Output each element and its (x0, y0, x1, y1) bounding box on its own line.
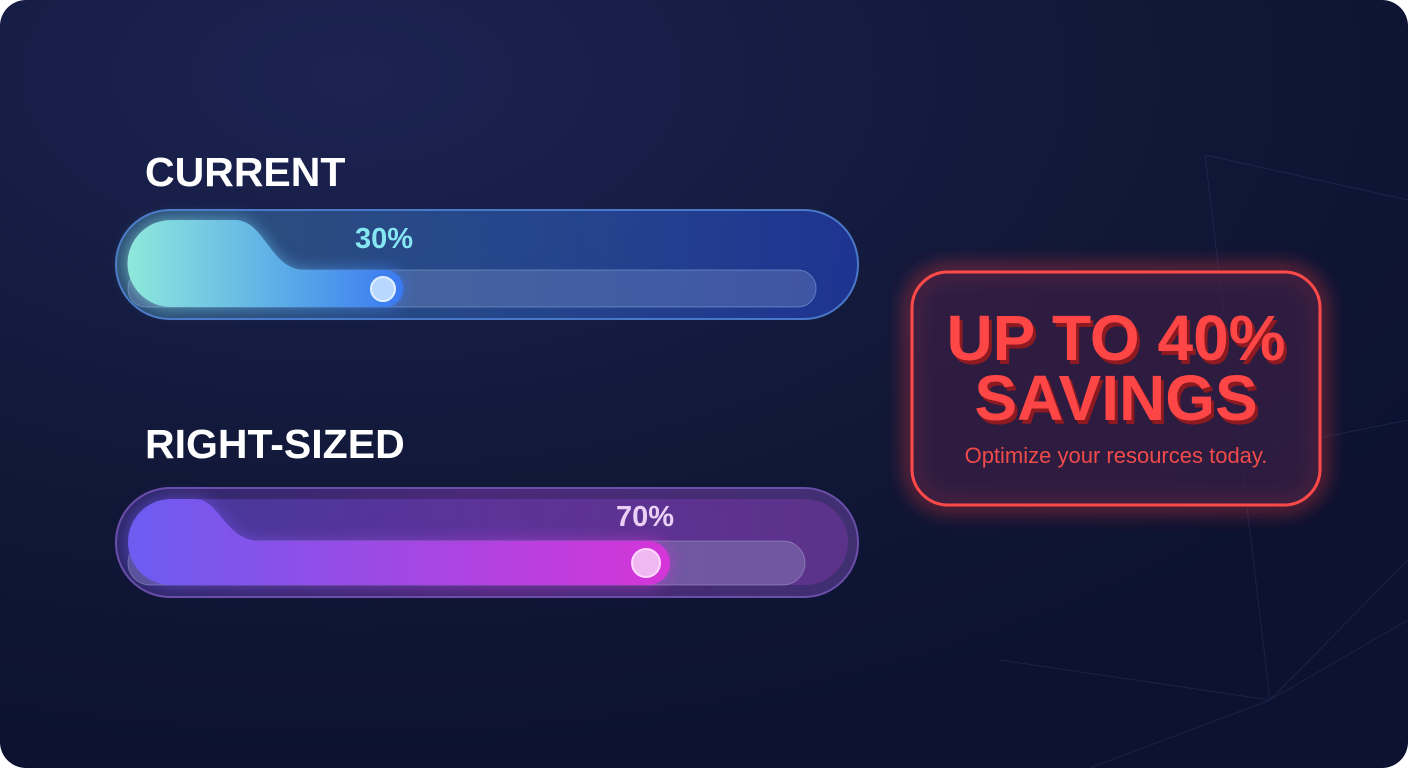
knob (371, 277, 395, 301)
callout: savings (912, 272, 1320, 505)
callout: savings: SAVINGS (974, 362, 1258, 434)
callout: savings: Optimize your resources today. (965, 443, 1267, 468)
bar: current 30% (116, 210, 858, 319)
heading: current: CURRENT (145, 149, 345, 195)
heading: right-sized: RIGHT-SIZED (145, 421, 405, 467)
callout: savings: UP TO 40% (946, 302, 1286, 374)
knob (632, 549, 660, 577)
callout: savings: UP TO 40% (949, 306, 1289, 378)
label 30%: 30% (355, 223, 413, 255)
callout: savings: SAVINGS (977, 366, 1261, 438)
bar: right-sized 70% (116, 488, 858, 597)
label 70%: 70% (616, 501, 674, 533)
